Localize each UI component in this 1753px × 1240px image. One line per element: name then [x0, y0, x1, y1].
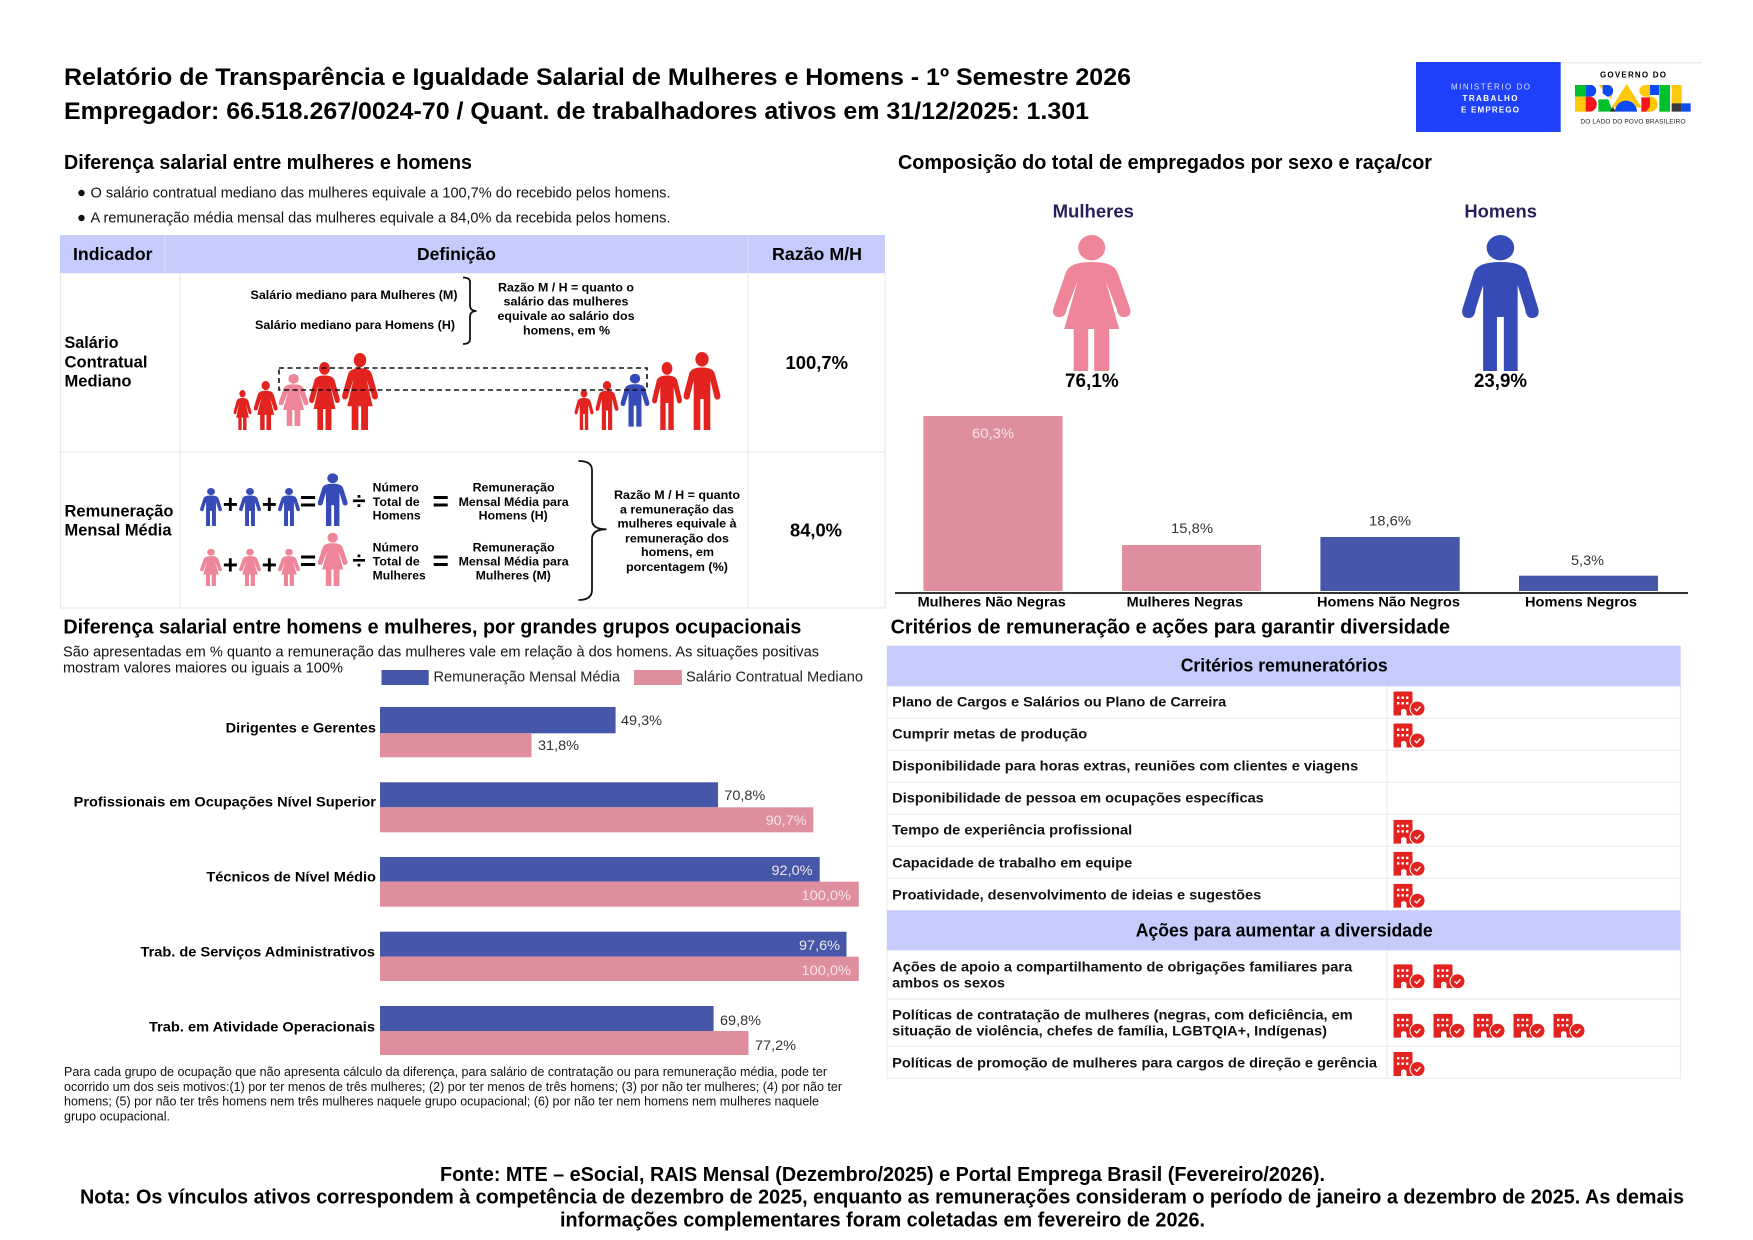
footnote [64, 1065, 842, 1124]
group: serviços administrativos [140, 932, 859, 981]
footnote: ocorrido um dos seis motivos:(1) por ter menos de três mulheres; (2) por ter menos de três homens; (3) por não ter mulheres; (4) por não ter [64, 1080, 842, 1094]
icon: mulher [1053, 235, 1130, 371]
table header [73, 244, 862, 264]
criteria rows: Capacidade de trabalho em equipe [892, 855, 1132, 871]
formula: homens: + [262, 489, 277, 519]
formula: mulheres: + [223, 549, 238, 579]
action rows: situação de violência, chefes de família, LGBTQIA+, Indígenas) [892, 1023, 1327, 1039]
definition text: razão salário [498, 281, 635, 337]
logo: ministério e governo: TRABALHO [1462, 94, 1518, 103]
title: Empregador: 66.518.267/0024-70 / Quant. de trabalhadores ativos em 31/12/2025: 1.301 [64, 98, 1089, 125]
definition text: razão salário: equivale ao salário dos [498, 309, 635, 323]
value: 76,1%: 76,1% [1065, 371, 1119, 392]
action rows: Políticas de contratação de mulheres (negras, com deficiência, em [892, 1007, 1353, 1023]
bar chart: sexo e raça/cor: 15,8% [1171, 520, 1213, 536]
panel: tabela de indicadores [60, 235, 885, 608]
footnote: homens; (5) por não ter três homens nem três mulheres naquele grupo ocupacional; (6) por não ter nem homens nem mulheres naquele [64, 1095, 819, 1109]
criteria rows: Cumprir metas de produção [892, 726, 1087, 742]
dashed box: mediana [279, 368, 647, 390]
formula: mulheres: Mulheres (M) [476, 568, 551, 582]
formula: mulheres: Total de [373, 555, 420, 569]
row label: salário contratual mediano: Contratual [64, 354, 148, 372]
icon: homem [1462, 235, 1539, 371]
bullet text: A remuneração média mensal das mulheres equivale a 84,0% da recebida pelos homens. [90, 210, 670, 227]
formula: mulheres: ÷ [352, 548, 366, 574]
heading: grupos ocupacionais: Diferença salarial entre homens e mulheres, por grandes grupos ocupacionais [63, 616, 801, 638]
group: técnicos [206, 857, 859, 907]
value: 84,0%: 84,0% [790, 520, 842, 541]
definition text: salário mediano: Salário mediano para Homens (H) [255, 318, 455, 332]
group: dirigentes e gerentes: Dirigentes e Gerentes [226, 720, 376, 736]
heading: critérios: Critérios de remuneração e ações para garantir diversidade [891, 616, 1450, 638]
group: serviços administrativos: Trab. de Serviços Administrativos [140, 944, 375, 960]
group: técnicos: Técnicos de Nível Médio [206, 869, 376, 885]
bar chart: sexo e raça/cor: Mulheres Negras [1127, 594, 1243, 610]
action rows: ambos os sexos [892, 975, 1005, 991]
table header: Indicador [73, 244, 153, 264]
text: explicação: mostram valores maiores ou iguais a 100% [63, 661, 343, 677]
logo: ministério e governo: E EMPREGO [1461, 105, 1519, 114]
value: 100,7%: 100,7% [786, 352, 848, 373]
definition text: razão remuneração: mulheres equivale à [618, 516, 737, 530]
bar chart: sexo e raça/cor: Mulheres Não Negras [918, 594, 1066, 610]
header: critérios remuneratórios [887, 646, 1680, 686]
table header: Definição [417, 244, 496, 264]
table header: Razão M/H [772, 244, 862, 264]
definition text: razão salário: Razão M / H = quanto o [498, 281, 634, 295]
definition text: salário mediano [250, 288, 458, 332]
group: profissionais: 90,7% [766, 812, 807, 828]
group: profissionais: 70,8% [724, 787, 765, 803]
icons: ações [1394, 964, 1586, 1077]
formula: mulheres: = [433, 545, 449, 576]
formula: homens: = [300, 486, 316, 516]
formula: mulheres [200, 533, 569, 586]
panel: critérios e ações [887, 646, 1680, 1078]
brace: salário [463, 278, 476, 344]
formula: mulheres: Número [373, 541, 419, 555]
group: serviços administrativos: 97,6% [799, 937, 840, 953]
group: técnicos: 92,0% [772, 862, 812, 878]
criteria rows: Disponibilidade para horas extras, reuniões com clientes e viagens [892, 758, 1358, 774]
group: dirigentes e gerentes: 49,3% [621, 712, 662, 728]
definition text: salário mediano: Salário mediano para Mulheres (M) [250, 288, 458, 302]
footer: fonte e nota: informações complementares foram coletadas em fevereiro de 2026. [560, 1210, 1205, 1232]
bullet text [78, 185, 671, 227]
definition text: razão remuneração: porcentagem (%) [626, 560, 728, 574]
formula: homens: ÷ [352, 488, 366, 515]
formula: mulheres: Remuneração [473, 541, 555, 555]
formula: homens [200, 473, 569, 526]
criteria rows: Tempo de experiência profissional [892, 822, 1132, 838]
label: mulheres: Mulheres [1053, 201, 1134, 222]
criteria rows: Disponibilidade de pessoa em ocupações específicas [892, 790, 1264, 806]
formula: homens: + [223, 489, 238, 519]
formula: homens: = [433, 486, 449, 516]
formula: mulheres: + [262, 549, 277, 579]
bar chart: sexo e raça/cor: Homens Negros [1525, 594, 1637, 610]
brace: remuneração [578, 461, 606, 600]
footer: fonte e nota: Nota: Os vínculos ativos correspondem à competência de dezembro de 2025, enquanto as remunerações consideram o período de janeiro a dezembro de 2025. As demais [80, 1186, 1684, 1208]
group: profissionais [74, 782, 813, 832]
group: atividade operacional [149, 1006, 796, 1055]
title [64, 64, 1131, 125]
formula: mulheres: Mensal Média para [459, 555, 569, 569]
action rows [892, 959, 1377, 1071]
group: atividade operacional: 69,8% [720, 1012, 761, 1028]
formula: homens: Homens (H) [479, 509, 548, 523]
row label: remuneração mensal média: Mensal Média [64, 522, 172, 540]
row label: salário contratual mediano [64, 334, 148, 391]
action rows: Ações de apoio a compartilhamento de obrigações familiares para [892, 959, 1352, 975]
definition text: razão salário: homens, em % [523, 323, 610, 337]
group: atividade operacional: 77,2% [755, 1037, 796, 1053]
group: atividade operacional: Trab. em Atividade Operacionais [149, 1019, 375, 1035]
action rows: Políticas de promoção de mulheres para cargos de direção e gerência [892, 1055, 1377, 1071]
row label: remuneração mensal média: Remuneração [64, 503, 174, 521]
definition text: razão remuneração: remuneração dos [625, 531, 729, 545]
header: ações para aumentar a diversidade: Ações para aumentar a diversidade [1136, 921, 1433, 941]
icon: mulheres ordenadas por salário [234, 353, 378, 430]
bar chart: sexo e raça/cor: 18,6% [1369, 513, 1411, 529]
criteria rows: Plano de Cargos e Salários ou Plano de Carreira [892, 694, 1226, 710]
group: técnicos: 100,0% [802, 887, 851, 903]
text: explicação [63, 645, 819, 677]
formula: homens: Total de [373, 495, 420, 509]
title: Relatório de Transparência e Igualdade Salarial de Mulheres e Homens - 1º Semestre 2026 [64, 64, 1131, 91]
row label: salário contratual mediano: Salário [64, 334, 118, 352]
bar chart: grupos ocupacionais [74, 707, 859, 1055]
icon: homens ordenados por salário [575, 352, 720, 430]
header: critérios remuneratórios: Critérios remuneratórios [1181, 656, 1388, 676]
logo: ministério e governo: MINISTÉRIO DO [1451, 82, 1530, 91]
formula: mulheres: Mulheres [373, 568, 426, 582]
icons: critérios [1394, 692, 1426, 909]
footnote: Para cada grupo de ocupação que não apresenta cálculo da diferença, para salário de contratação ou para remuneração média, pode ter [64, 1065, 827, 1079]
legend [382, 670, 863, 686]
formula: homens: Mensal Média para [459, 495, 569, 509]
group: profissionais: Profissionais em Ocupações Nível Superior [74, 794, 377, 810]
logo: ministério e governo: GOVERNO DO [1600, 70, 1666, 79]
value: 23,9%: 23,9% [1474, 371, 1527, 392]
group: dirigentes e gerentes [226, 707, 662, 757]
bar chart: sexo e raça/cor: 5,3% [1571, 552, 1604, 568]
bar chart: sexo e raça/cor: 60,3% [972, 425, 1014, 441]
label: homens: Homens [1464, 201, 1537, 222]
footnote: grupo ocupacional. [64, 1110, 170, 1124]
formula: homens: Homens [373, 509, 421, 523]
bar chart: sexo e raça/cor: Homens Não Negros [1317, 594, 1460, 610]
panel: composição por sexo [1053, 201, 1539, 392]
formula: homens: Remuneração [473, 481, 555, 495]
footer: fonte e nota [80, 1164, 1684, 1232]
definition text: razão remuneração: homens, em [641, 545, 714, 559]
group: dirigentes e gerentes: 31,8% [538, 737, 579, 753]
bullet text: O salário contratual mediano das mulheres equivale a 100,7% do recebido pelos homens. [90, 185, 670, 202]
text: explicação: São apresentadas em % quanto a remuneração das mulheres vale em relação à dos homens. As situações positivas [63, 645, 819, 661]
header: ações para aumentar a diversidade [887, 910, 1680, 950]
criteria rows: Proatividade, desenvolvimento de ideias e sugestões [892, 887, 1261, 903]
group: serviços administrativos: 100,0% [802, 962, 851, 978]
logo: ministério e governo: DO LADO DO POVO BRASILEIRO [1580, 118, 1686, 125]
formula: homens: Número [373, 481, 419, 495]
definition text: razão remuneração: a remuneração das [620, 502, 734, 516]
definition text: razão remuneração: Razão M / H = quanto [614, 488, 740, 502]
bar chart: sexo e raça/cor [895, 416, 1688, 610]
row label: remuneração mensal média [64, 503, 174, 540]
footer: fonte e nota: Fonte: MTE – eSocial, RAIS Mensal (Dezembro/2025) e Portal Emprega Brasil (Fevereiro/2026). [440, 1164, 1325, 1186]
heading: diferença salarial: Diferença salarial entre mulheres e homens [64, 152, 472, 174]
row label: salário contratual mediano: Mediano [64, 373, 132, 391]
legend: Salário Contratual Mediano [686, 670, 863, 686]
logo: ministério e governo [1416, 62, 1702, 132]
formula: mulheres: = [300, 545, 316, 576]
definition text: razão remuneração [614, 488, 740, 574]
criteria rows [892, 694, 1358, 903]
legend: Remuneração Mensal Média [434, 670, 621, 686]
definition text: razão salário: salário das mulheres [504, 295, 629, 309]
heading: composição: Composição do total de empregados por sexo e raça/cor [898, 152, 1432, 174]
